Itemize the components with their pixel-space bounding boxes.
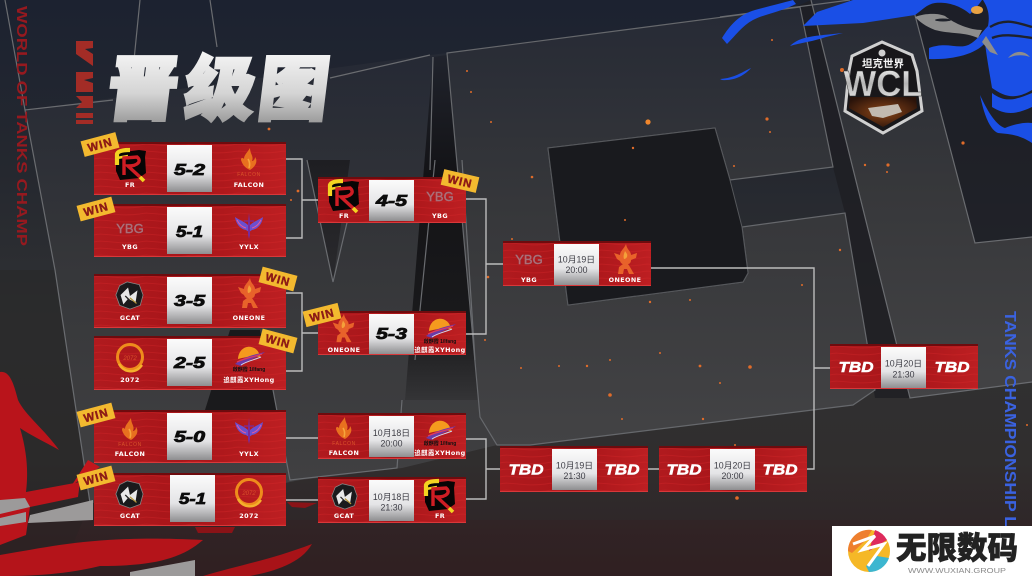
match card: ONEONE 5-3 XYHong xyxy=(318,311,466,355)
watermark xyxy=(832,526,1032,576)
match card: ONEONE 5-3 XYHong: ONEONE xyxy=(328,346,360,354)
match card: TBD 10月19日 21:30 TBD: 21:30 xyxy=(563,471,586,481)
match card: final TBD 10月20日 21:30 TBD: TBD xyxy=(934,360,970,376)
match card: FALCON 10月18日 20:00 XYHong: FALCON xyxy=(329,449,359,457)
right vertical text: TANKS CHAMPIONSHIP L xyxy=(1001,311,1018,527)
dark folds in blue flag xyxy=(990,22,1032,38)
WIN tag: ONEONE xyxy=(259,267,297,291)
match card: TBD 10月20日 20:00 TBD: TBD xyxy=(762,462,798,478)
WIN tag: XYHong xyxy=(259,329,297,353)
connector lines xyxy=(286,159,830,500)
match card: 2072 2-5 XYHong xyxy=(94,336,286,390)
emblem: red mark next to title xyxy=(76,41,93,124)
match card: TBD 10月19日 21:30 TBD: 10月19日 xyxy=(556,460,593,470)
WIN tag: FALCON xyxy=(77,403,115,427)
match card: FALCON 10月18日 20:00 XYHong: 10月18日 xyxy=(373,428,410,438)
match card: YBG 10月19日 20:00 ONEONE xyxy=(503,241,651,286)
match card: final TBD 10月20日 21:30 TBD: 21:30 xyxy=(892,370,915,380)
match card: YBG 10月19日 20:00 ONEONE: 20:00 xyxy=(565,265,588,275)
match card: FALCON 10月18日 20:00 XYHong: 追麒霞XYHong xyxy=(414,448,466,457)
WIN tag: YBG: WIN xyxy=(83,201,110,219)
match card: FR 4-5 YBG: 4-5 xyxy=(375,193,408,210)
WIN tag: YBG semifinal: WIN xyxy=(446,173,473,191)
gray flag top right xyxy=(915,6,1030,58)
WIN tag: XYHong: WIN xyxy=(264,333,291,351)
match card: final TBD 10月20日 21:30 TBD xyxy=(830,344,978,389)
match card: 2072 2-5 XYHong: 追麒霞XYHong xyxy=(223,375,275,384)
match card: GCAT 10月18日 21:30 FR: 21:30 xyxy=(380,502,403,512)
title: 晋 xyxy=(103,50,183,129)
match card: TBD 10月20日 20:00 TBD: 20:00 xyxy=(721,471,744,481)
match card: TBD 10月20日 20:00 TBD xyxy=(659,446,807,492)
match card: FALCON 5-0 YYLX: YYLX xyxy=(238,450,259,458)
match card: TBD 10月19日 21:30 TBD xyxy=(500,446,648,492)
match card: ONEONE 5-3 XYHong: 5-3 xyxy=(376,326,408,343)
left vertical text: WORLD OF TANKS CHAMP xyxy=(13,6,30,246)
match card: FR 5-2 FALCON: 5-2 xyxy=(174,162,206,179)
match card: GCAT 3-5 ONEONE: ONEONE xyxy=(233,314,265,322)
match card: 2072 2-5 XYHong: 2-5 xyxy=(173,355,206,372)
match card: GCAT 3-5 ONEONE: 3-5 xyxy=(174,293,206,310)
match card: 2072 2-5 XYHong: 2072 xyxy=(120,376,140,384)
WIN tag: FR xyxy=(81,132,119,157)
match card: FR 5-2 FALCON: FALCON xyxy=(234,181,264,189)
match card: TBD 10月19日 21:30 TBD: TBD xyxy=(604,462,640,478)
match card: GCAT 5-1 2072: 2072 xyxy=(239,512,259,520)
WIN tag: YBG xyxy=(77,197,115,221)
match card: FR 5-2 FALCON: FR xyxy=(125,181,135,189)
match card: YBG 10月19日 20:00 ONEONE: 10月19日 xyxy=(558,254,595,264)
match card: GCAT 10月18日 21:30 FR: 10月18日 xyxy=(373,492,410,502)
match card: FALCON 10月18日 20:00 XYHong xyxy=(318,413,466,459)
WIN tag: YBG semifinal xyxy=(441,169,479,193)
match card: FR 4-5 YBG: FR xyxy=(339,212,349,220)
match card: GCAT 3-5 ONEONE xyxy=(94,274,286,328)
WIN tag: ONEONE: WIN xyxy=(264,271,291,289)
title: 级 xyxy=(180,50,260,129)
match card: YBG 5-1 YYLX: YBG xyxy=(121,243,138,251)
match card: YBG 10月19日 20:00 ONEONE: ONEONE xyxy=(609,276,641,284)
WIN tag: FR: WIN xyxy=(87,137,114,155)
match card: GCAT 5-1 2072: 5-1 xyxy=(179,491,206,508)
match card: FALCON 5-0 YYLX: FALCON xyxy=(115,450,145,458)
red flags bottom left xyxy=(0,372,317,576)
WIN tag: FALCON: WIN xyxy=(83,407,110,425)
match card: FR 4-5 YBG: YBG xyxy=(431,212,448,220)
title: 图 xyxy=(254,50,334,129)
match card: FALCON 5-0 YYLX xyxy=(94,410,286,463)
match card: FALCON 5-0 YYLX: 5-0 xyxy=(174,429,206,446)
match card: TBD 10月20日 20:00 TBD: 10月20日 xyxy=(714,460,751,470)
match card: final TBD 10月20日 21:30 TBD: 10月20日 xyxy=(885,358,922,368)
match card: GCAT 3-5 ONEONE: GCAT xyxy=(120,314,140,322)
watermark: WWW.WUXIAN.GROUP xyxy=(908,566,1006,575)
match card: GCAT 10月18日 21:30 FR: FR xyxy=(435,512,445,520)
match card: FR 4-5 YBG xyxy=(318,177,466,223)
match card: YBG 5-1 YYLX: 5-1 xyxy=(176,224,203,241)
WIN tag: ONEONE semifinal: WIN xyxy=(309,307,336,325)
match card: GCAT 5-1 2072: GCAT xyxy=(120,512,140,520)
match card: GCAT 10月18日 21:30 FR xyxy=(318,477,466,523)
match card: GCAT 5-1 2072 xyxy=(94,473,286,526)
match card: ONEONE 5-3 XYHong: 追麒霞XYHong xyxy=(414,345,466,354)
WIN tag: ONEONE semifinal xyxy=(303,303,341,327)
match card: GCAT 10月18日 21:30 FR: GCAT xyxy=(334,512,354,520)
WIN tag: GCAT: WIN xyxy=(83,470,110,488)
blue flags top right xyxy=(720,0,1032,143)
match card: TBD 10月19日 21:30 TBD: TBD xyxy=(508,462,544,478)
match card: final TBD 10月20日 21:30 TBD: TBD xyxy=(838,360,874,376)
match card: YBG 5-1 YYLX: YYLX xyxy=(238,243,259,251)
match card: FALCON 10月18日 20:00 XYHong: 20:00 xyxy=(380,438,403,448)
match card: FR 5-2 FALCON xyxy=(94,142,286,195)
WCL logo xyxy=(844,42,922,133)
match card: YBG 10月19日 20:00 ONEONE: YBG xyxy=(520,276,537,284)
watermark: 无限数码 xyxy=(896,531,1018,566)
WIN tag: GCAT xyxy=(77,466,115,490)
WCL logo: WCL xyxy=(844,63,922,104)
match card: TBD 10月20日 20:00 TBD: TBD xyxy=(666,462,702,478)
sparks xyxy=(268,39,1028,500)
match card: YBG 5-1 YYLX xyxy=(94,204,286,257)
WCL logo: 坦克世界 xyxy=(862,57,904,70)
title xyxy=(103,50,334,129)
